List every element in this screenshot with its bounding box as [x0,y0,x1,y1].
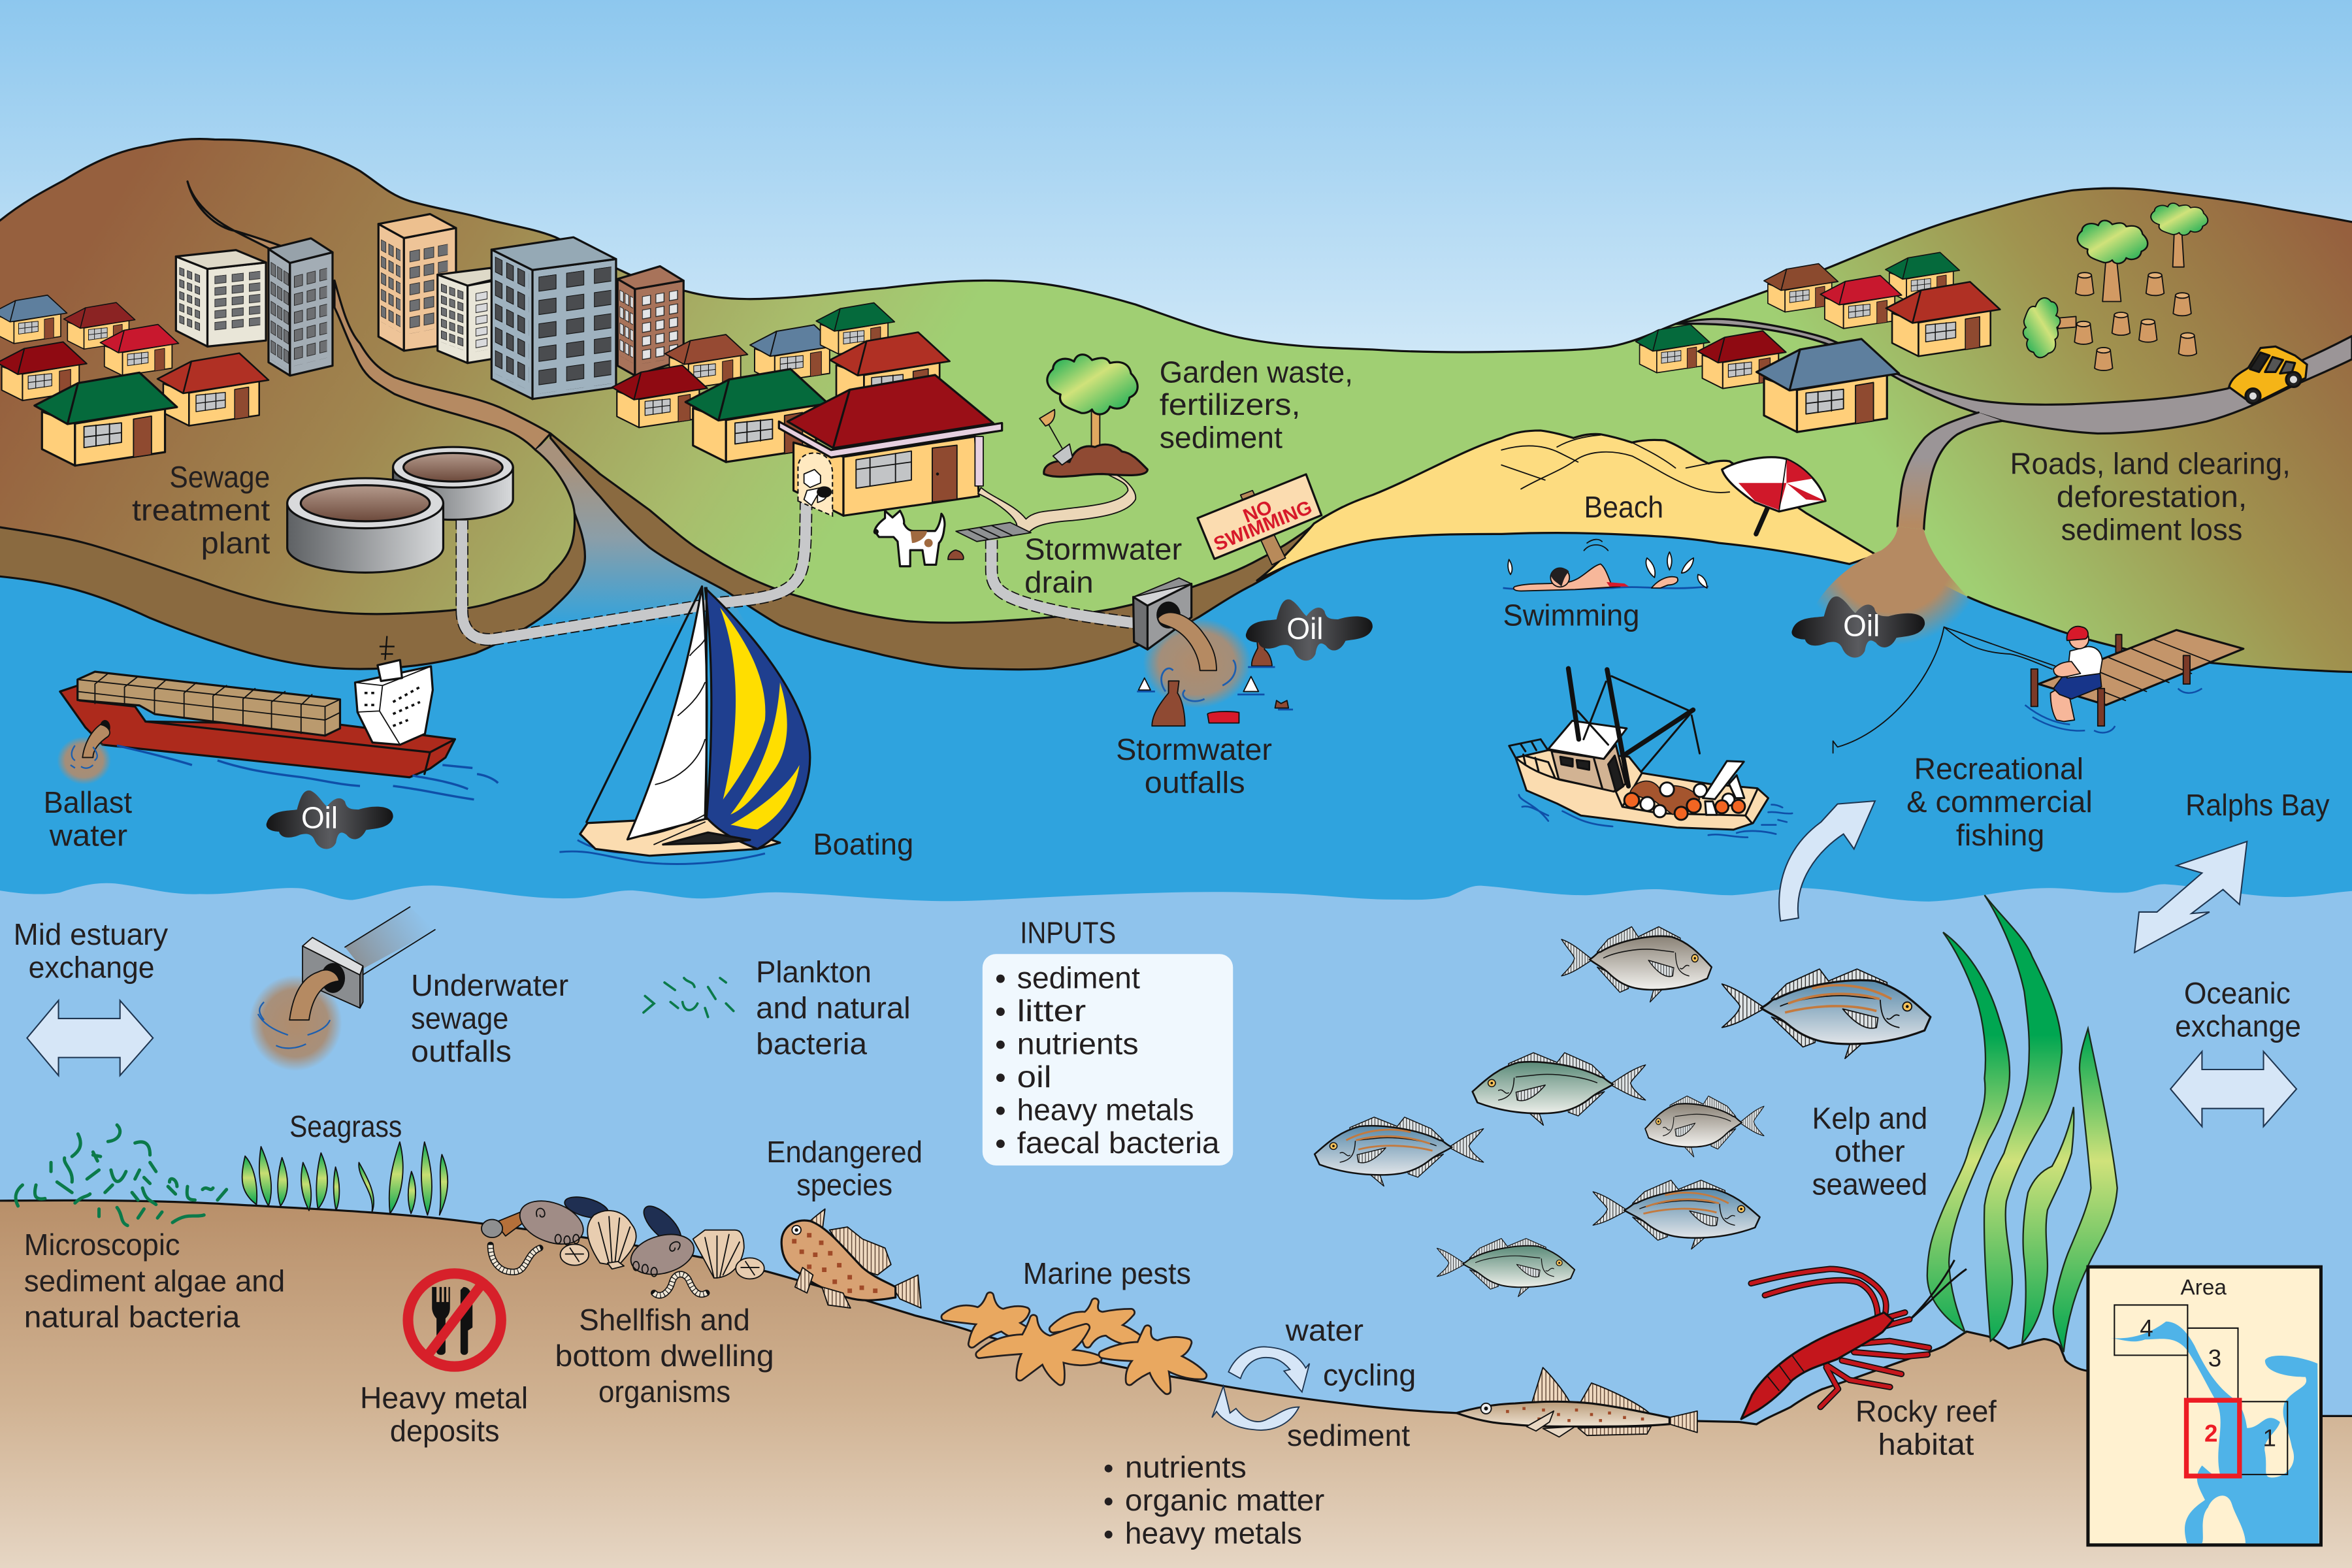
label: oceanic exchange: exchange [2175,1009,2301,1043]
stream through the town [188,182,551,450]
area inset map: Area [2181,1275,2227,1299]
fish school [1315,927,1931,1297]
jetty and fisherman [1833,627,2244,753]
area inset map: 4 [2140,1315,2153,1342]
label: garden waste: sediment [1160,420,1282,454]
shellfish and bottom dwelling organisms [482,1193,764,1296]
oil slick 2 [1791,596,1925,658]
seabed [0,1200,2352,1568]
label: swimming: Swimming [1503,598,1639,632]
label: seagrass: Seagrass [289,1109,402,1143]
label: ballast water: water [49,818,127,852]
label: shellfish: organisms [598,1375,730,1409]
label: beach: Beach [1584,490,1663,524]
tree stumps [2074,272,2197,370]
label: microscopic algae: Microscopic [24,1228,180,1262]
label: ballast water [44,785,132,852]
peach building [378,214,456,351]
red lobster [1741,1260,1967,1419]
area inset map [2088,1267,2321,1545]
label: sediment: sediment [1287,1418,1410,1452]
garden runoff [978,474,1135,532]
fishing boat [1509,668,1792,838]
heading: inputs: INPUTS [1020,916,1116,950]
oceanic exchange arrow [2170,1051,2296,1126]
label: garden waste [1160,355,1353,454]
label: roads and land clearing [2010,447,2291,547]
label: stormwater drain: drain [1024,565,1094,599]
oil slick 3: Oil [301,800,338,834]
label: stormwater outfalls: Stormwater [1116,732,1272,766]
land: hills and shoreline [0,139,2352,705]
label: shellfish [555,1303,774,1409]
label: stormwater outfalls: outfalls [1145,765,1245,799]
container ship [60,636,498,800]
litter: bottles, cans [1137,640,1293,726]
label: boating: Boating [813,827,913,861]
label: microscopic algae: sediment algae and [24,1264,285,1298]
garden tree and mound [1039,355,1147,477]
area inset map: 1 [2263,1424,2276,1451]
sediment fan from road [1806,527,1984,648]
oil slick 3 [267,791,393,849]
toilet cutaway [798,453,832,516]
label: heavy metal deposits: Heavy metal [360,1380,528,1414]
label: mid estuary exchange [14,917,168,984]
label: rocky reef: habitat [1878,1428,1974,1462]
oil slick 2: Oil [1843,608,1880,642]
label: mid estuary exchange: exchange [29,950,154,984]
INPUTS box: oil [1017,1060,1051,1094]
label: endangered species: species [796,1168,892,1201]
ballast discharge [57,720,111,785]
label: cycling: cycling [1323,1358,1416,1392]
label: rocky reef: Rocky reef [1855,1394,1997,1428]
big blue-grey building [491,237,616,399]
sky background [0,0,2352,450]
label: heavy metal deposits: deposits [390,1414,500,1448]
label: mid estuary exchange: Mid estuary [14,917,168,951]
INPUTS box [983,954,1233,1166]
fish blue 3 [1593,1180,1760,1249]
fish green 2 [1437,1239,1575,1297]
label: stormwater drain: Stormwater [1024,532,1182,566]
fish grey 1 [1561,927,1712,1002]
label: microscopic algae: natural bacteria [24,1299,240,1333]
centre houses [612,303,950,462]
small cream building [438,268,502,363]
label: sewage treatment plant: Sewage [169,460,270,494]
seagrass [242,1142,448,1215]
label: microscopic algae [24,1228,285,1333]
label: fishing [1906,752,2093,852]
endangered handfish [781,1209,921,1308]
INPUTS box: faecal bacteria [1017,1126,1220,1160]
estuary sediment plume [495,438,750,638]
water surface [0,438,2352,915]
microscopic sediment algae [16,1125,227,1226]
label: oceanic exchange: Oceanic [2184,976,2291,1010]
dog [874,511,945,566]
label: plankton [756,955,911,1061]
shoreline to the east [1968,597,2352,672]
yellow car [2229,346,2307,404]
dog dropping [948,550,964,559]
label: underwater sewage outfalls: Underwater [411,968,568,1002]
label: fishing: & commercial [1906,785,2093,819]
swimmer [1503,540,1708,591]
label: endangered species: Endangered [766,1135,923,1169]
label: plankton: and natural [756,990,911,1024]
label: stormwater outfalls [1116,732,1272,799]
right river bank [551,434,1343,670]
label: Ralphs Bay: Ralphs Bay [2185,788,2330,822]
felled tree [2023,298,2076,357]
plankton [644,978,734,1017]
no swimming sign: NO [1240,497,1275,527]
second tree [2151,203,2208,267]
label: underwater sewage outfalls: outfalls [411,1034,512,1068]
starfish marine pests [945,1296,1203,1390]
INPUTS box: sediment [1017,961,1140,995]
cream building [176,250,266,346]
fish green 1 [1473,1053,1646,1125]
INPUTS box: nutrients [1017,1027,1139,1061]
left river bank [0,450,585,669]
no swimming sign [1198,474,1322,564]
oil slick 1: Oil [1286,612,1324,645]
curved arrow: recreational fishing [1779,801,1875,921]
label: fishing: fishing [1956,818,2044,852]
right hill houses, trees, car [1636,203,2307,432]
stormwater drain grate [956,523,1031,542]
lizardfish on seabed [1456,1367,1697,1437]
area inset map: 2 [2204,1420,2217,1446]
underwater sewage outfall [249,907,435,1071]
area inset map: 3 [2208,1345,2221,1372]
label: plankton: Plankton [756,955,872,988]
label: kelp [1812,1102,1927,1201]
label: sewage treatment plant: treatment [132,493,270,527]
no swimming sign: SWIMMING [1211,497,1315,555]
INPUTS box: heavy metals [1017,1093,1194,1127]
fish grey 2 [1645,1096,1764,1157]
no eating icon [408,1273,501,1367]
list: sediment contents: heavy metals [1125,1516,1302,1550]
fish blue 2 [1315,1117,1484,1186]
left tanks and buildings [0,214,950,572]
sewage pipe [462,497,806,640]
label: kelp: seaweed [1812,1168,1927,1201]
label: roads and land clearing: deforestation, [2057,480,2247,514]
label: kelp: other [1835,1134,1905,1168]
label: endangered species [766,1135,923,1201]
fish blue 1 [1722,969,1931,1058]
label: oceanic exchange [2175,976,2301,1043]
label: shellfish: Shellfish and [579,1303,750,1337]
label: fishing: Recreational [1914,752,2083,786]
main house with toilet and gutter [779,375,1002,516]
label: roads and land clearing: Roads, land clearing, [2010,447,2291,481]
label: marine pests: Marine pests [1023,1256,1191,1290]
sewage treatment plant tanks [287,447,513,572]
label: underwater sewage outfalls: sewage [411,1002,508,1036]
diagonal double arrow [2134,841,2247,953]
stormwater outfall [1134,578,1251,708]
oil slick 1 [1246,599,1373,661]
brown building [617,267,683,376]
list: sediment contents [1105,1450,1324,1550]
beach sand dunes [1257,431,1876,581]
label: water: water [1285,1313,1364,1347]
roads on right hill [1676,319,2352,529]
label: garden waste: fertilizers, [1160,387,1301,421]
sailboat [559,587,810,864]
label: rocky reef [1855,1394,1997,1462]
list: sediment contents: nutrients [1125,1450,1247,1484]
label: heavy metal deposits [360,1380,528,1448]
label: garden waste: Garden waste, [1160,355,1353,389]
label: ballast water: Ballast [44,785,132,819]
water sediment cycling arrows [1212,1347,1309,1430]
mid estuary arrow [27,1000,153,1075]
label: sewage treatment plant [132,460,270,560]
label: underwater sewage outfalls [411,968,568,1068]
label: sewage treatment plant: plant [201,526,270,560]
grey tower [269,238,333,376]
tall tree [2078,220,2148,301]
left houses [0,295,269,466]
kelp [1927,895,2117,1352]
stormwater pipe [992,540,1135,623]
underwater zone [0,883,2352,1568]
label: stormwater drain [1024,532,1182,599]
beach umbrella [1722,457,1825,534]
label: plankton: bacteria [756,1027,868,1061]
label: kelp: Kelp and [1812,1102,1927,1135]
label: shellfish: bottom dwelling [555,1339,774,1373]
list: sediment contents: organic matter [1125,1483,1324,1517]
INPUTS box: litter [1017,994,1086,1028]
label: roads and land clearing: sediment loss [2061,513,2242,547]
